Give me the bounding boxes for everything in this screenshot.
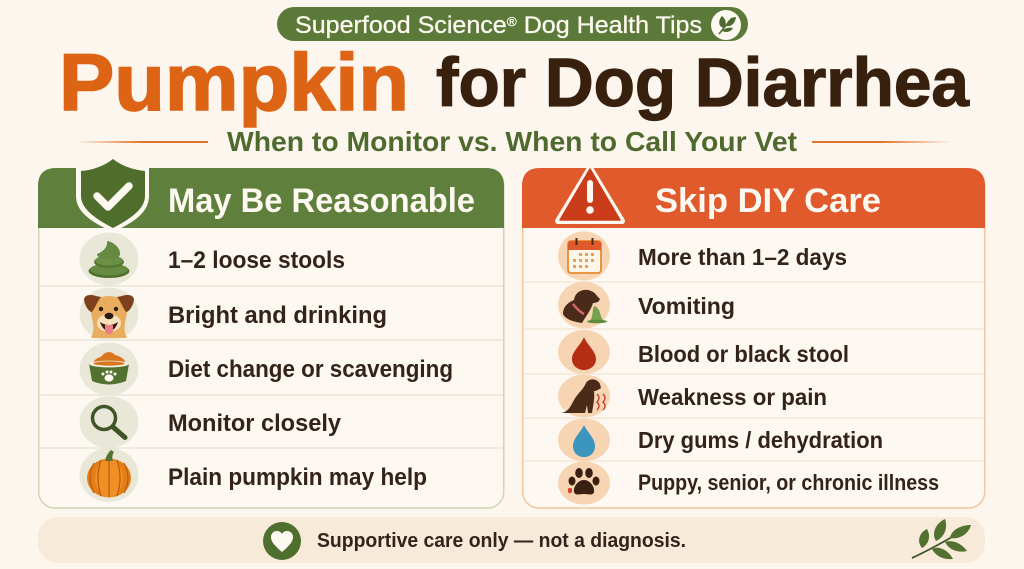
title: for Dog Diarrhea [436,44,970,121]
icon: vomiting dog [558,282,610,328]
panel: may be reasonable: Diet change or scavenging [168,356,453,383]
panel: skip diy care: Dry gums / dehydration [638,427,883,453]
panel: may be reasonable [38,159,504,508]
icon: leaf sprig [912,519,971,559]
icon: blood drop [558,330,610,374]
panel: skip diy care: Weakness or pain [638,384,827,410]
left panel header: May Be Reasonable [168,182,475,220]
icon: heart [263,522,301,560]
icon: calendar [558,232,610,280]
panel: skip diy care: More than 1–2 days [638,244,847,270]
row dividers [523,282,984,461]
panel: skip diy care: Vomiting [638,293,735,319]
top badge: Superfood Science [295,12,498,39]
icon: paw print [558,462,610,504]
top badge: ® [507,14,517,29]
icon: shield check [76,159,149,232]
panel: skip diy care [522,168,985,508]
title: Pumpkin [59,38,409,128]
title [59,38,970,128]
left panel header [38,168,504,228]
panel: may be reasonable: Bright and drinking [168,302,387,329]
top badge [277,7,748,41]
icon: happy dog [80,288,138,340]
icon: stool [80,232,138,286]
top badge: Dog Health Tips [517,12,702,39]
icon: warning triangle [558,168,622,221]
subtitle: When to Monitor vs. When to Call Your Vet [227,126,797,157]
right panel header [522,168,985,228]
icon: pumpkin [80,448,138,502]
icon: leaf badge [711,10,741,40]
footer banner [38,517,985,563]
panel: skip diy care: Puppy, senior, or chronic illness [638,470,939,495]
icon: food bowl [80,342,138,396]
footer banner: Supportive care only — not a diagnosis. [317,529,686,552]
panel: may be reasonable: Monitor closely [168,410,342,437]
icon: magnifier [80,396,138,448]
icon: water drop [558,418,610,462]
panel: may be reasonable: 1–2 loose stools [168,247,345,274]
panel: may be reasonable: Plain pumpkin may help [168,464,427,491]
panel: skip diy care: Blood or black stool [638,341,849,367]
right panel header: Skip DIY Care [655,182,881,220]
icon: weak dog [558,374,610,418]
row dividers [39,286,503,448]
